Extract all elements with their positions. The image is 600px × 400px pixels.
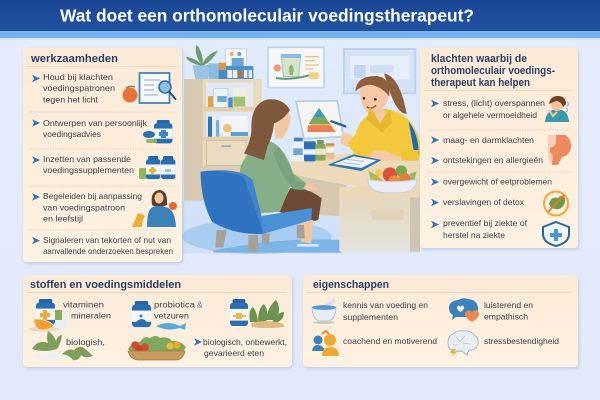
title banner: Wat doet een orthomoleculair voedingstherapeut? bbox=[60, 6, 474, 26]
item: preventief: herstel na ziekte bbox=[443, 231, 505, 240]
poster bbox=[268, 47, 324, 88]
item: biologisch onbewerkt: biologisch, onbewerkt, bbox=[203, 338, 287, 347]
item: overgewicht: overgewicht of eetproblemen bbox=[443, 178, 552, 186]
supplement bottles on desk bbox=[292, 138, 334, 161]
icon: mortar and pestle bbox=[312, 300, 336, 324]
patient bbox=[240, 99, 322, 247]
heading: eigenschappen: eigenschappen bbox=[313, 279, 389, 291]
item: klachten en voedingspatronen: tegen het licht bbox=[43, 96, 99, 104]
text: vitaminen mineralen bbox=[63, 300, 111, 320]
clipboard bbox=[327, 154, 382, 171]
floor rug bbox=[182, 201, 341, 253]
central illustration: consultation scene bbox=[182, 40, 421, 254]
text: luisterend en empathisch: empathisch bbox=[484, 312, 528, 322]
item: preventief: preventief bij ziekte of bbox=[443, 219, 528, 228]
text: probiotica en vetzuren: & bbox=[197, 300, 203, 310]
therapist bbox=[331, 73, 421, 161]
heading: klachten bbox=[431, 53, 555, 89]
item: biologisch onbewerkt: gevarieerd eten bbox=[204, 349, 264, 358]
text: kennis van voeding bbox=[343, 301, 428, 322]
heading: stoffen: stoffen en voedingsmiddelen bbox=[30, 279, 181, 291]
text: probiotica en vetzuren: vetzuren bbox=[154, 312, 189, 320]
text: probiotica en vetzuren: probiotica bbox=[154, 300, 195, 310]
item: begeleiden bij aanpassing: van voedingspatroon bbox=[43, 204, 125, 212]
text: vitaminen mineralen: vitaminen bbox=[63, 300, 105, 310]
icon: supplement bottle bbox=[143, 120, 172, 143]
blue chair bbox=[201, 170, 312, 252]
item: signaleren van tekorten bbox=[32, 236, 173, 256]
item: klachten en voedingspatronen: Houd bij klachten bbox=[43, 73, 113, 82]
item: ontstekingen en allergieën: ontstekingen en allergieën bbox=[443, 156, 543, 165]
item: passende voedingssupplementen bbox=[32, 155, 134, 175]
heading: klachten: orthomoleculair voedings- bbox=[431, 65, 555, 77]
icon: food basket bbox=[128, 336, 186, 360]
item: passende voedingssupplementen: Inzetten van passende bbox=[43, 155, 131, 164]
text: probiotica en vetzuren bbox=[154, 300, 203, 320]
item: stress: stress, (licht) overspannen bbox=[443, 99, 545, 108]
heading: klachten: klachten waarbij de bbox=[431, 53, 527, 65]
item: klachten en voedingspatronen bbox=[32, 73, 115, 104]
item: biologisch onbewerkt bbox=[194, 338, 287, 358]
potted plant bbox=[186, 45, 219, 79]
panel: stoffen en voedingsmiddelen bbox=[23, 275, 292, 367]
item: persoonlijk voedingsadvies: voedingsadvies bbox=[43, 130, 101, 139]
icon: digestive system bbox=[548, 135, 571, 165]
icon: woman with fruit bbox=[132, 190, 177, 227]
item: preventief bbox=[431, 219, 528, 240]
item: verslavingen: verslavingen of detox bbox=[443, 198, 524, 207]
food pyramid screen bbox=[296, 101, 343, 139]
text: luisterend en empathisch bbox=[484, 301, 533, 322]
window bbox=[344, 49, 415, 93]
icon: two supplement bottles bbox=[139, 156, 175, 179]
bookshelf bbox=[184, 79, 262, 201]
icon: speech bubble with hearts bbox=[449, 298, 479, 322]
item: begeleiden bij aanpassing: Begeleiden bij aanpassing bbox=[43, 192, 142, 201]
text: stressbestendigheid: stressbestendigheid bbox=[484, 337, 559, 346]
item: persoonlijk voedingsadvies: Ontwerpen van persoonlijk bbox=[43, 119, 148, 128]
item: passende voedingssupplementen: voedingssupplementen bbox=[43, 166, 134, 175]
icon: herbal bottle with leaves bbox=[230, 299, 284, 328]
text: kennis van voeding: kennis van voeding en bbox=[343, 301, 428, 310]
item: maag- en darmklachten: maag- en darmklachten bbox=[443, 136, 534, 145]
heading: werkzaamheden: werkzaamheden bbox=[30, 53, 118, 65]
item: persoonlijk voedingsadvies bbox=[32, 119, 148, 139]
icon: herbs and pills bbox=[32, 331, 93, 360]
icon: probiotics bottle and fish bbox=[132, 301, 186, 330]
item: stress: or algehele vermoeidheid bbox=[443, 111, 537, 120]
item: signaleren van tekorten: Signaleren van tekorten of nut van bbox=[43, 236, 171, 245]
item: klachten en voedingspatronen: voedingspatronen bbox=[43, 84, 115, 93]
icon: prohibited leaf bbox=[544, 192, 568, 216]
text: coachend en motiverend: coachend en motiverend bbox=[343, 337, 437, 346]
icon: vitamins bottle and orange bbox=[29, 299, 66, 332]
icon: coaching people bbox=[312, 331, 339, 356]
title banner bbox=[0, 0, 600, 40]
item: signaleren van tekorten: aanvallende onderzoeken bespreken bbox=[43, 247, 173, 256]
text: vitaminen mineralen: mineralen bbox=[71, 312, 111, 320]
text: luisterend en empathisch: luisterend en bbox=[484, 301, 533, 310]
panel: eigenschappen bbox=[303, 275, 578, 367]
item: begeleiden bij aanpassing: en leefstijl bbox=[43, 214, 83, 224]
icon: tired person bbox=[545, 96, 569, 122]
icon: brain with lightning bbox=[448, 331, 478, 356]
item: stress bbox=[431, 99, 545, 120]
desk bbox=[292, 153, 420, 252]
fruit bowl bbox=[367, 165, 417, 193]
icon: checklist with magnifier and tomato bbox=[122, 73, 176, 103]
items on shelf bbox=[209, 49, 253, 79]
heading: klachten: therapeut kan helpen bbox=[431, 77, 530, 89]
panel: klachten bbox=[420, 48, 578, 248]
text: kennis van voeding: supplementen bbox=[343, 313, 398, 322]
icon: shield with plus bbox=[543, 222, 569, 246]
panel: werkzaamheden bbox=[23, 48, 182, 262]
item: begeleiden bij aanpassing bbox=[32, 192, 142, 224]
text: biologish: biologish, bbox=[66, 338, 105, 347]
